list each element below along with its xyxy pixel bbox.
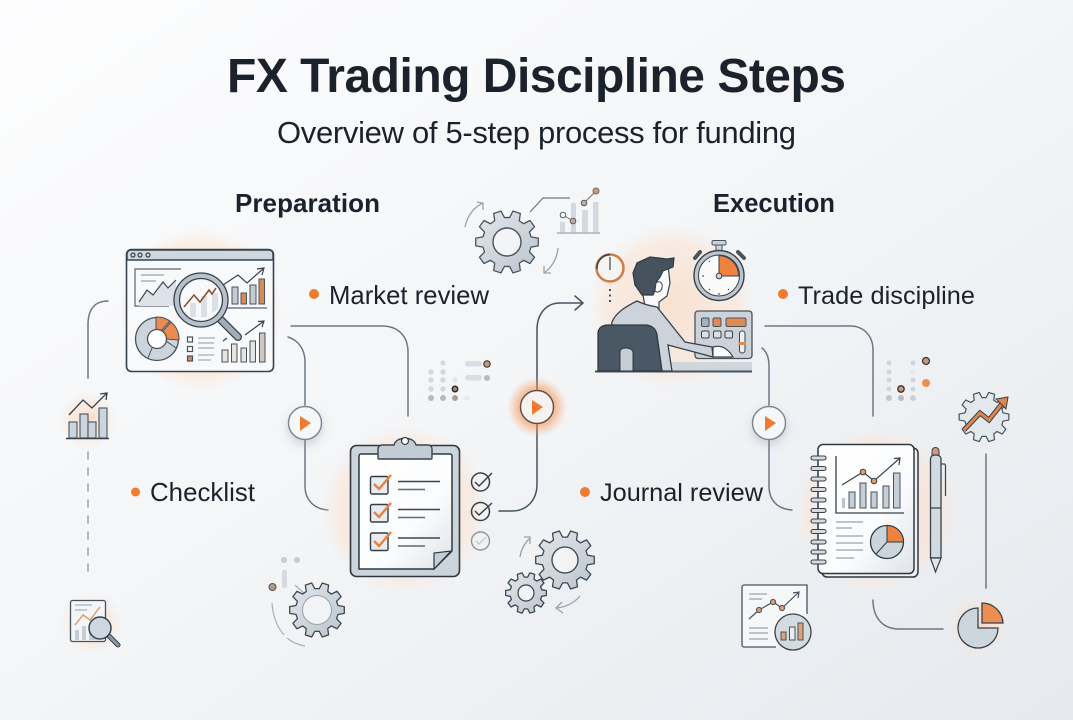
panel: journal notebook illustration <box>794 428 958 592</box>
connector lines <box>88 296 986 629</box>
icon: pie chart <box>946 594 1010 658</box>
play button: left <box>288 406 322 444</box>
small gear <box>506 573 546 613</box>
browser window <box>126 250 274 372</box>
stopwatch <box>694 240 744 300</box>
icon: paired gears <box>506 531 594 613</box>
small clock <box>596 254 624 304</box>
heading: preparation: Preparation <box>235 188 380 218</box>
icon: small growth chart <box>58 390 118 450</box>
icon: gear bottom left <box>269 557 344 646</box>
large gear <box>536 531 594 589</box>
bullet label: market review: Market review <box>329 282 489 310</box>
heading: execution: Execution <box>713 190 835 218</box>
list <box>188 337 215 361</box>
magnifier <box>174 273 238 337</box>
clip <box>378 438 432 459</box>
icon: report with magnifier <box>60 592 124 656</box>
bar chart top right <box>223 268 267 308</box>
icon: report with bar badge <box>742 585 811 650</box>
decorative dot cluster: right <box>886 358 930 401</box>
line chart card <box>135 269 181 306</box>
notebook text lines <box>836 522 863 558</box>
notebook pie chart <box>870 526 904 558</box>
panel: trader at desk illustration <box>590 225 754 389</box>
play button: right <box>752 406 786 444</box>
icon: faded analytics chart <box>530 188 600 233</box>
check items <box>370 475 440 550</box>
desk <box>670 362 752 371</box>
bar chart bottom right <box>222 321 265 362</box>
spiral binding <box>811 456 826 564</box>
icon: top gear with arrows <box>465 202 558 273</box>
bullet label: journal review: Journal review <box>600 479 764 507</box>
panel: checklist clipboard illustration <box>321 426 492 594</box>
bullet label: trade discipline: Trade discipline <box>798 282 975 310</box>
bullet label: checklist: Checklist <box>150 479 255 507</box>
donut chart <box>136 317 179 360</box>
subtitle: Overview of 5-step process for funding <box>277 115 796 150</box>
title: FX Trading Discipline Steps <box>227 50 846 103</box>
decorative dot cluster: center <box>428 360 490 401</box>
pen <box>930 448 946 572</box>
chair <box>598 325 662 371</box>
panel: market review dashboard illustration <box>118 228 282 392</box>
icon: gear with rising arrow <box>959 392 1009 442</box>
check circles <box>472 473 492 550</box>
notebook chart <box>836 456 904 513</box>
play button: center highlighted <box>507 377 567 437</box>
keypad <box>695 311 752 358</box>
person <box>611 257 733 371</box>
